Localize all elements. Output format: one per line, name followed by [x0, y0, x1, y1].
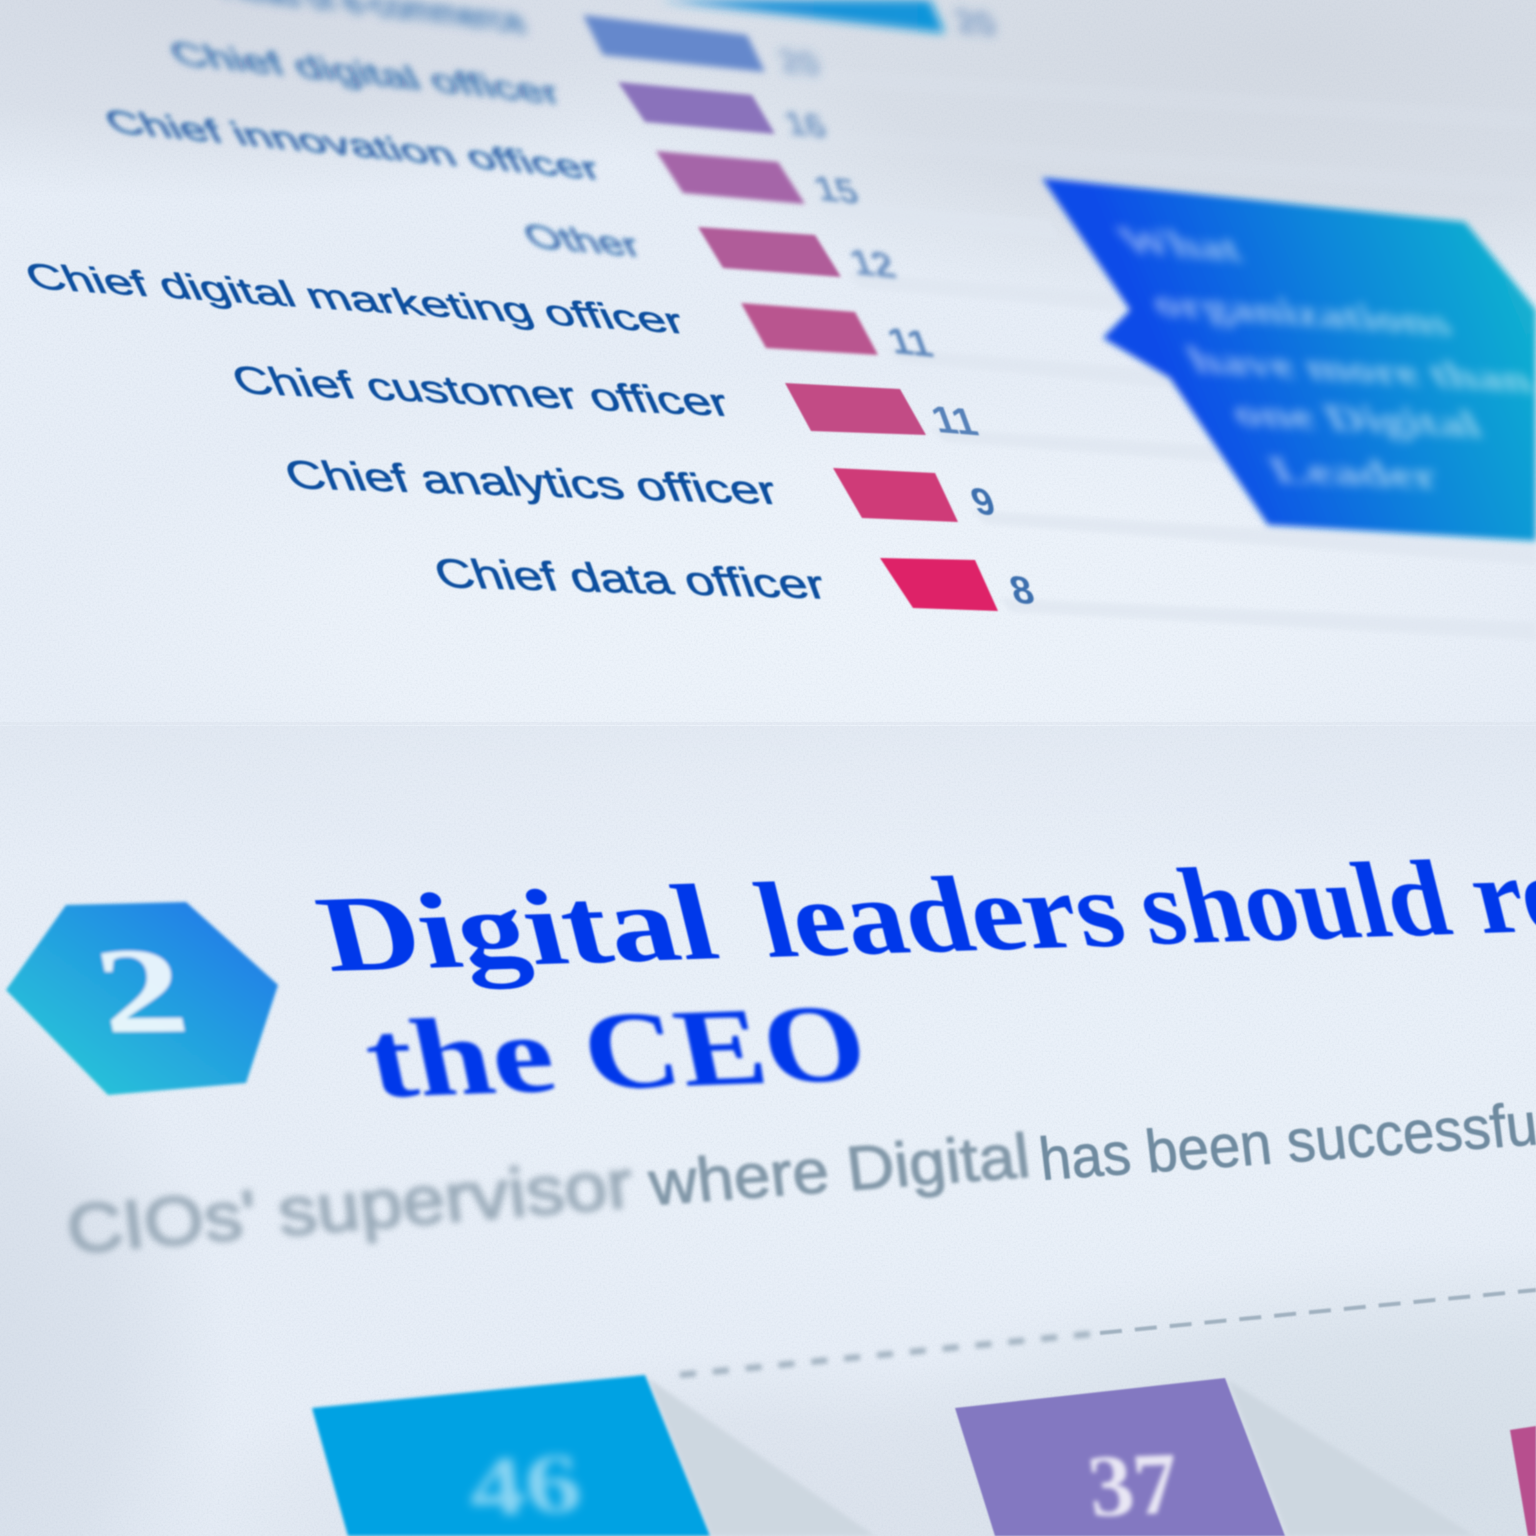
subtitle part: middle: where Digital	[644, 1122, 1034, 1219]
tile shadow	[1228, 1380, 1475, 1536]
callout text: What	[1109, 219, 1251, 270]
callout text: organizations	[1142, 282, 1460, 345]
heading line 1: Digital	[306, 862, 728, 995]
section heading 2	[6, 834, 1536, 1121]
callout text: Leader	[1260, 449, 1448, 497]
heading line 2: the	[354, 992, 565, 1121]
value: chief analytics officer: 9	[965, 481, 1001, 524]
bar: chief digital marketing officer	[741, 303, 878, 355]
subtitle	[63, 1089, 1536, 1268]
tile shadow	[648, 1378, 875, 1536]
label: chief digital officer: Chief digital officer	[162, 35, 568, 112]
heading line 1	[306, 834, 1536, 995]
subtitle part: left, out of focus: CIOs' supervisor	[63, 1146, 637, 1268]
tile: 37	[955, 1378, 1475, 1536]
value: chief digital officer: 16	[779, 105, 832, 145]
label: chief innovation officer: Chief innovation officer	[97, 103, 608, 187]
heading line 1: should	[1126, 838, 1461, 968]
callout panel	[1042, 178, 1536, 541]
value: e-commerce: 20	[773, 43, 826, 83]
value: chief digital marketing officer: 11	[882, 320, 938, 366]
row stripes behind bars	[775, 66, 1536, 640]
bar: chief analytics officer	[833, 468, 958, 522]
value: chief innovation officer: 15	[808, 168, 864, 212]
callout text: one Digital	[1222, 392, 1490, 446]
icon: numbered hexagon	[6, 902, 278, 1095]
icon: numbered hexagon: 2	[84, 922, 197, 1059]
bar: e-commerce	[583, 15, 765, 72]
label: chief data officer: Chief data officer	[428, 551, 832, 608]
label: chief digital marketing officer: Chief digital marketing officer	[18, 257, 692, 342]
value: chief data officer: 8	[1005, 569, 1039, 613]
callout text	[1109, 219, 1536, 497]
dashed axis line	[680, 1290, 1536, 1375]
bar: chief digital officer	[618, 82, 775, 134]
tile: third, cropped	[1510, 1426, 1536, 1536]
bar: top truncated row	[610, 0, 945, 33]
label: other: Other	[515, 217, 648, 264]
label: chief analytics officer: Chief analytics officer	[278, 453, 785, 514]
bar: other	[698, 227, 841, 277]
bar chart: digital roles	[18, 0, 1039, 613]
bar: chief data officer	[880, 558, 998, 611]
heading line 2: CEO	[571, 981, 877, 1113]
label: chief customer officer: Chief customer officer	[224, 358, 737, 425]
tile value: 46	[463, 1437, 586, 1535]
value: other: 12	[844, 242, 901, 287]
callout: what organizations have	[1042, 178, 1536, 541]
bar: chief customer officer	[785, 383, 926, 435]
value: chief customer officer: 11	[925, 398, 983, 444]
tile value: 37	[1083, 1435, 1184, 1536]
heading line 1: leaders	[744, 849, 1136, 981]
heading line 2	[354, 981, 877, 1121]
tile body	[312, 1375, 710, 1536]
callout text: have more than	[1179, 339, 1536, 401]
value: top row: 20	[949, 3, 1002, 43]
bar: chief innovation officer	[656, 151, 805, 204]
tile body	[955, 1378, 1285, 1536]
tile: 46	[312, 1375, 875, 1536]
